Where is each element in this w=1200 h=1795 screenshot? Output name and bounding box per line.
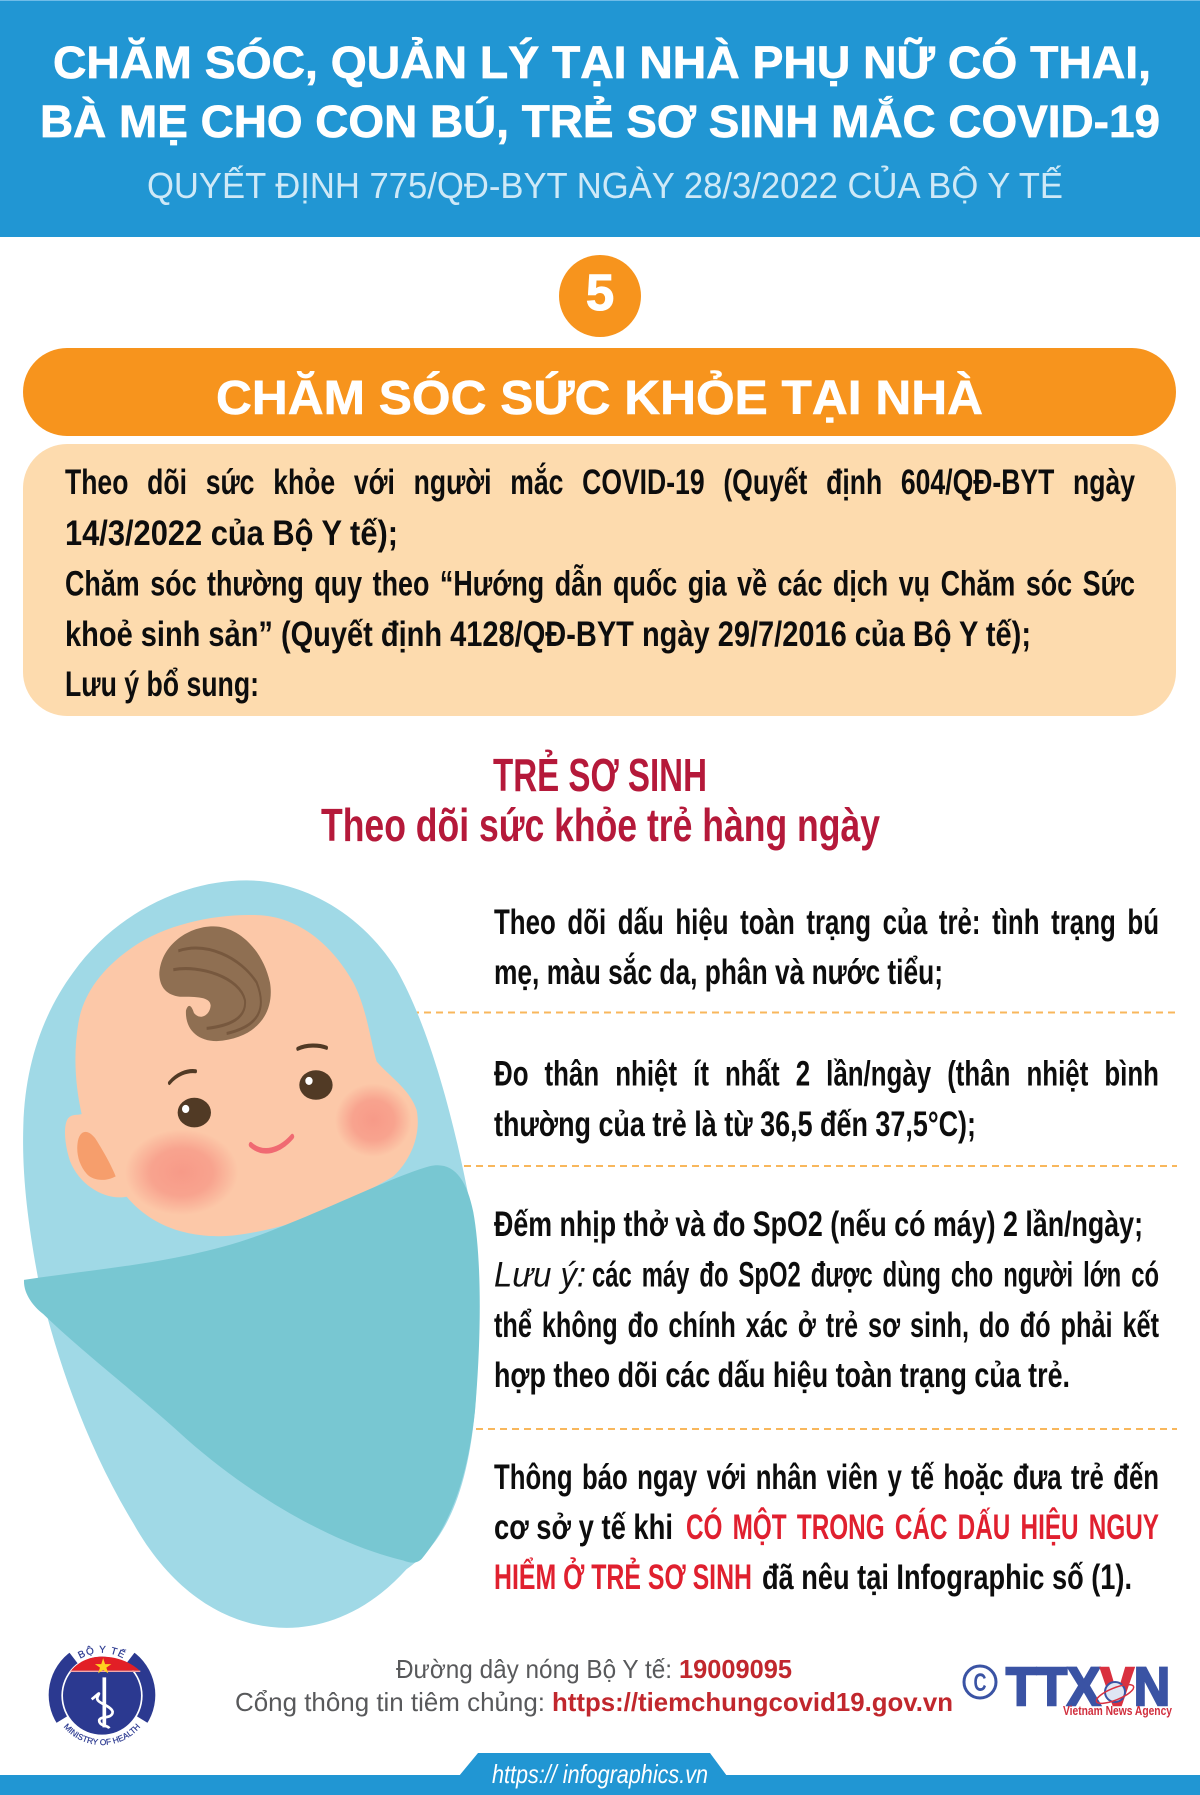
swaddle blanket bbox=[23, 880, 479, 1628]
number badge 5: 5 bbox=[586, 264, 614, 321]
newborn heading: Theo dõi sức khỏe trẻ hàng ngày bbox=[321, 799, 880, 851]
left cheek bbox=[125, 1129, 238, 1215]
logo: Ministry of Health bbox=[48, 1646, 156, 1746]
logo: TTXVN: Vietnam News Agency bbox=[1063, 1704, 1172, 1718]
logo: Ministry of Health: MINISTRY OF HEALTH bbox=[64, 1723, 140, 1746]
left eye bbox=[178, 1098, 211, 1127]
number badge 5 bbox=[559, 255, 641, 337]
newborn heading bbox=[321, 749, 880, 851]
hotline text bbox=[235, 1654, 953, 1717]
text block: warning: cơ sở y tế khi bbox=[494, 1508, 673, 1547]
logo: Ministry of Health: BỘ Y TẾ bbox=[78, 1646, 126, 1658]
panel: monitoring summary: khoẻ sinh sản” (Quyết định 4128/QĐ-BYT ngày 29/7/2016 của Bộ Y tế); bbox=[65, 615, 1031, 654]
text block: general signs bbox=[494, 903, 1159, 992]
panel: monitoring summary bbox=[23, 444, 1176, 716]
blanket fold bbox=[24, 1165, 480, 1563]
text block: warning bbox=[494, 1458, 1159, 1597]
title line 2: BÀ MẸ CHO CON BÚ, TRẺ SƠ SINH MẮC COVID-19 bbox=[40, 96, 1160, 147]
text block: temperature bbox=[494, 1054, 1159, 1144]
right eye bbox=[299, 1070, 333, 1100]
eyebrows bbox=[169, 1046, 327, 1083]
hair bbox=[159, 926, 271, 1041]
head bbox=[65, 915, 418, 1236]
footer bar with website tab bbox=[0, 1753, 1200, 1795]
hotline text: Đường dây nóng Bộ Y tế: bbox=[396, 1654, 672, 1684]
text block: general signs: mẹ, màu sắc da, phân và nước tiểu; bbox=[494, 952, 943, 992]
logo: TTXVN: C bbox=[974, 1669, 986, 1697]
panel: monitoring summary: 14/3/2022 của Bộ Y tế); bbox=[65, 514, 398, 553]
panel: monitoring summary: Lưu ý bổ sung: bbox=[65, 665, 259, 704]
section heading pill: CHĂM SÓC SỨC KHỎE TẠI NHÀ bbox=[216, 370, 983, 425]
newborn heading: TRẺ SƠ SINH bbox=[493, 749, 707, 801]
logo: TTXVN: TTXVN bbox=[1006, 1657, 1170, 1717]
title line 1: CHĂM SÓC, QUẢN LÝ TẠI NHÀ PHỤ NỮ CÓ THAI, bbox=[53, 37, 1151, 88]
footer bar with website tab: https:// infographics.vn bbox=[492, 1759, 708, 1789]
text block: warning: HIỂM Ở TRẺ SƠ SINH bbox=[494, 1557, 752, 1597]
text block: breathing and SpO2 bbox=[494, 1205, 1159, 1395]
section heading pill bbox=[23, 348, 1176, 436]
subtitle: QUYẾT ĐỊNH 775/QĐ-BYT NGÀY 28/3/2022 CỦA BỘ Y TẾ bbox=[147, 164, 1063, 206]
hotline text: Cổng thông tin tiêm chủng: bbox=[235, 1687, 545, 1717]
ear bbox=[77, 1132, 116, 1180]
header band bbox=[0, 0, 1200, 237]
hotline text: https://tiemchungcovid19.gov.vn bbox=[552, 1687, 953, 1717]
right cheek bbox=[335, 1083, 412, 1157]
text block: breathing and SpO2: Lưu ý: bbox=[494, 1256, 586, 1294]
hotline text: 19009095 bbox=[679, 1654, 792, 1684]
mouth bbox=[251, 1137, 292, 1151]
text block: temperature: thường của trẻ là từ 36,5 đến 37,5°C); bbox=[494, 1105, 976, 1144]
illustration: swaddled baby bbox=[23, 880, 480, 1628]
